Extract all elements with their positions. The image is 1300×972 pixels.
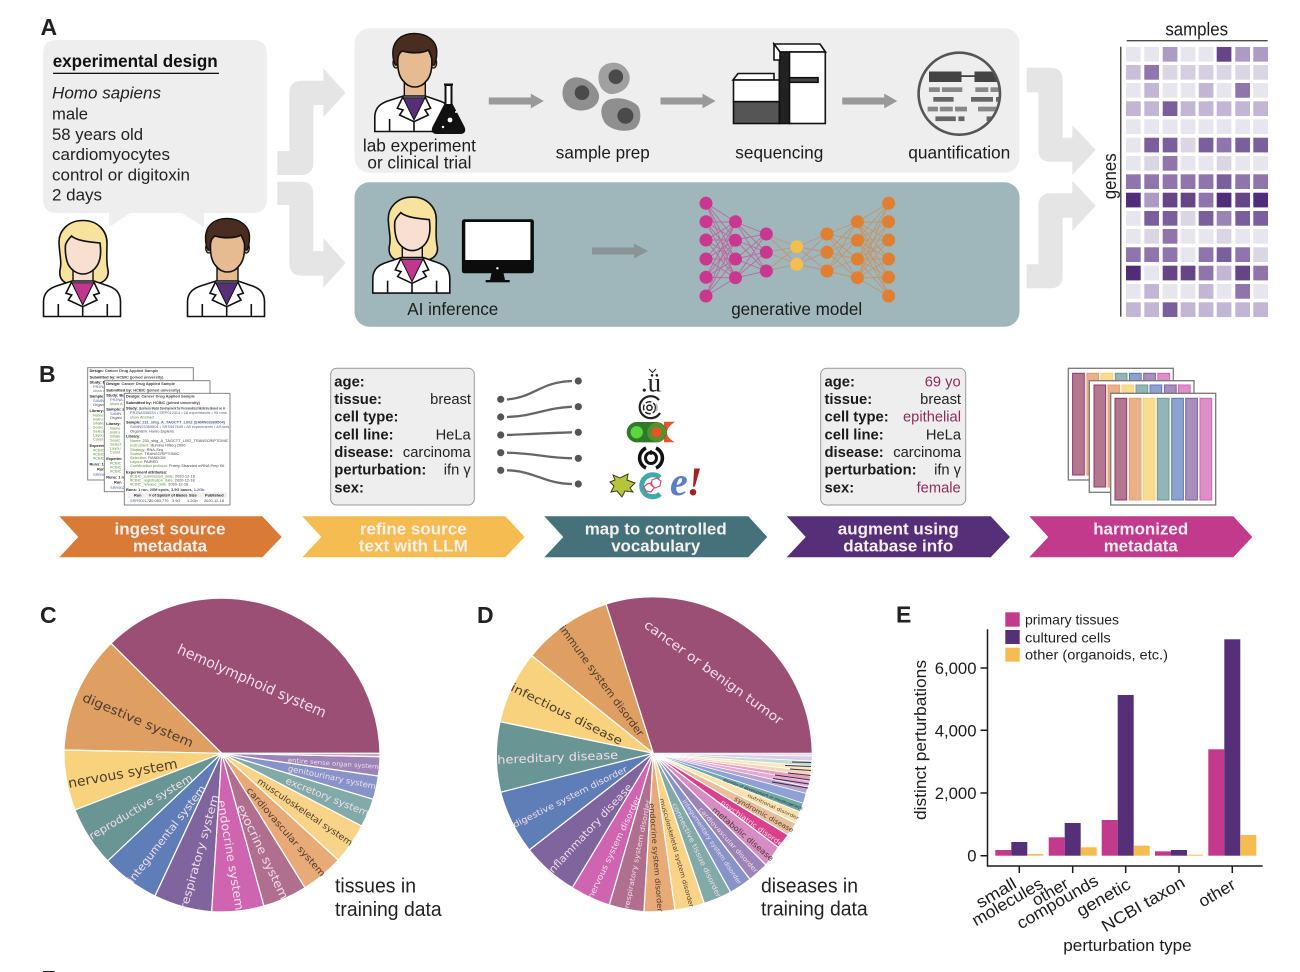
chart: diseases pie: inflammatory disease [544, 782, 635, 878]
panel letter C: C [40, 602, 57, 628]
panel: sparse metadata fields: cell type: [334, 410, 398, 426]
panel: source metadata documents: Runs: 1 run [106, 474, 128, 480]
panel: source metadata documents: #CBIC [93, 448, 105, 452]
chart: tissues pie: endocrine system [214, 799, 247, 911]
panel: source metadata documents: Submitted by: HCBIC (joined university) [106, 388, 181, 392]
panel: source metadata documents: Design: Cancer Drug Applied Sample [126, 394, 196, 398]
panel: source metadata documents: Layou [110, 446, 121, 450]
icon: quantification reads [919, 53, 1000, 135]
chart: diseases pie: immune system disorder [556, 623, 646, 739]
panel: augmented metadata fields: disease: [824, 445, 884, 461]
chart: diseases pie: hereditary disease [497, 748, 618, 767]
label: diseases in training data: training data [761, 899, 869, 921]
panel: source metadata documents: 3.9G [172, 498, 180, 503]
label: samples: samples [1165, 20, 1228, 40]
x axis title: perturbation type [1063, 936, 1192, 955]
panel: source metadata documents: #CBIC [110, 468, 122, 474]
step: augment using database info [787, 516, 1010, 557]
panel: source metadata documents: 20,083,770 [149, 498, 169, 503]
arrow: to sample prep [489, 94, 544, 108]
panel: source metadata documents: Study: Busi [106, 392, 128, 398]
panel: source metadata documents: SRR9021 [93, 472, 110, 477]
step: ingest source metadata: ingest source [114, 519, 226, 538]
panel: source metadata documents: Design: Cancer Drug Applied Sample [90, 368, 159, 373]
text block: design attributes: control or digitoxin [52, 166, 190, 185]
panel: augmented metadata fields: 69 yo [925, 375, 961, 391]
label: quantification: quantification [908, 142, 1010, 162]
chart: gene by sample heatmap [1100, 20, 1268, 317]
y tick labels: 2,000 [935, 784, 976, 803]
chart: tissues pie: entire sense organ system [288, 757, 379, 771]
panel: source metadata documents: Source: TRANSCRIPTOMIC [130, 451, 180, 456]
icon: vocabulary logo neuron [610, 474, 635, 497]
panel: sparse metadata fields: carcinoma [403, 445, 472, 461]
chart: diseases pie: psychiatric disorder [719, 799, 787, 850]
label: tissues in training data: training data [335, 899, 443, 921]
panel: source metadata documents: Sourc [93, 424, 103, 430]
panel: augmented metadata fields: female [917, 480, 961, 496]
chart: tissues pie: nervous system [67, 756, 179, 792]
chart: tissues pie: reproductive system [87, 772, 195, 842]
panel: source metadata documents: Library: [126, 434, 140, 439]
icon: vocabulary logo ring [640, 448, 662, 468]
panel letter D: D [477, 602, 494, 628]
panel: source metadata documents: Layout: PAIRED [130, 459, 158, 464]
panel: source metadata documents: Selection: RANDOM [130, 455, 165, 460]
panel: source metadata documents: show A [110, 401, 123, 406]
icon: man scientist [188, 218, 264, 316]
panel: augmented metadata fields: sex: [824, 480, 854, 496]
panel: source metadata documents: Select [110, 442, 122, 446]
panel: augmented metadata fields: epithelial [903, 410, 961, 426]
bars: other compounds [1049, 823, 1097, 856]
panel: source metadata documents: Experim [106, 456, 122, 461]
panel: source metadata documents: Instru [93, 416, 103, 422]
arrow: split up to lab path [277, 68, 346, 175]
panel: sparse metadata fields: cell line: [334, 427, 394, 443]
legend: other (organoids, etc.) [1025, 647, 1168, 663]
icon: vocabulary logo spiral [640, 396, 660, 418]
x tick labels: other [1195, 875, 1239, 911]
panel: source metadata documents: Run [114, 480, 122, 484]
chart: diseases pie: nervous system disorder [585, 794, 643, 900]
chart: perturbation bar chart [911, 612, 1263, 955]
chart: tissues pie: musculoskeletal system [255, 777, 354, 848]
chart: diseases pie: metabolic disease [710, 805, 776, 863]
panel: source metadata documents: show Abstract [130, 414, 155, 419]
bars: small molecules [995, 842, 1043, 856]
icon: vocabulary logo e!: e! [670, 459, 702, 504]
panel: augmented metadata fields: age: [824, 375, 855, 391]
panel: source metadata documents: #CBIC [93, 456, 105, 460]
arrow: to quantification [842, 94, 897, 108]
text block: design attributes [52, 83, 190, 205]
step: map to controlled vocabulary [544, 516, 767, 557]
panel: source metadata documents: Design: Cancer Drug Applied Sample [106, 381, 176, 386]
icon: vocabulary logo dot u: .ü [641, 368, 662, 398]
diagram: term mapping connectors [497, 377, 582, 488]
panel: source metadata documents: Submitted by: HCBIC (joined university) [90, 374, 164, 380]
icon: vocabulary logo green and red [627, 422, 675, 442]
icon: woman scientist [44, 220, 120, 316]
chart: tissues pie: cardiovascular system [244, 785, 327, 879]
panel: source metadata documents: 2020-12-18 [204, 498, 224, 503]
chart: diseases pie [496, 597, 812, 913]
panel: source metadata documents: Submitted by: HCBIC (joined university) [126, 400, 201, 405]
panel: augmented metadata fields [821, 368, 966, 505]
panel: source metadata documents: Run [97, 466, 105, 472]
step: ingest source metadata: metadata [133, 537, 208, 556]
chart: diseases pie: cancer or benign tumor [641, 618, 786, 729]
panel: sparse metadata fields: ifn γ [444, 462, 471, 478]
text block: design attributes: male [52, 104, 88, 123]
panel: source metadata documents: SAMN [93, 398, 104, 403]
panel: source metadata documents [88, 368, 230, 505]
label: lab experiment: or clinical trial [367, 152, 471, 172]
legend: primary tissues [1025, 612, 1119, 628]
x tick labels: small [973, 874, 1020, 912]
panel: source metadata documents: Layou [93, 432, 104, 438]
panel: source metadata documents: SRR902172 [130, 498, 151, 503]
panel: source metadata documents: Strategy: RNA-Seq [130, 447, 163, 452]
panel: source metadata documents: #CBIC [110, 464, 122, 470]
panel: sparse metadata fields [331, 368, 474, 505]
chart: diseases pie: integumentary system disorder [681, 798, 743, 886]
panel letter A: A [40, 14, 57, 40]
arrow: split down to AI path [277, 182, 346, 288]
label: sequencing: sequencing [735, 142, 823, 162]
step: refine source text with LLM: refine source [360, 519, 467, 538]
text block: design attributes: cardiomyocytes [52, 145, 170, 164]
panel: sparse metadata fields: breast [430, 392, 471, 408]
panel: source metadata documents: Runs: 1 run [90, 462, 112, 466]
panel: source metadata documents: Experim [90, 443, 105, 448]
bars: NCBI taxon [1155, 850, 1203, 856]
panel: source metadata documents: Size [189, 492, 198, 498]
panel: source metadata documents: Study: Bus [90, 380, 110, 384]
legend [1005, 612, 1168, 663]
icon: vocabulary logo teal ring [642, 475, 661, 497]
chart: tissues pie: integumental system [125, 783, 209, 886]
axes [980, 629, 1263, 873]
step: harmonized metadata [1029, 516, 1252, 557]
chart: diseases pie: cardiovascular disorder [697, 806, 759, 875]
panel: augmented metadata fields: ifn γ [934, 462, 962, 478]
label: generative model: generative model [731, 299, 862, 319]
label: lab experiment: lab experiment [363, 136, 476, 156]
panel: source metadata documents: Organism: Homo sapiens [130, 428, 174, 433]
panel: source metadata documents: #CBIC_release_date: 2020-12-18 [130, 482, 188, 486]
bars: genetic [1102, 695, 1150, 856]
panel: source metadata documents: Select [93, 428, 105, 434]
panel: source metadata documents: Name [93, 412, 103, 418]
y tick labels: 4,000 [935, 721, 976, 740]
label: tissues in training data: tissues in [335, 876, 416, 898]
panel: source metadata documents: show A [93, 388, 106, 393]
step: map to controlled vocabulary: vocabulary [611, 537, 701, 556]
chart: tissues pie [64, 598, 380, 912]
step: augment using database info: augment using [838, 519, 959, 538]
panel: source metadata documents: Organi [93, 402, 105, 407]
chart: tissues pie: digestive system [80, 690, 196, 750]
icon: scientist [373, 197, 450, 293]
chart: tissues pie: hemolymphoid system [175, 642, 328, 721]
panel: sparse metadata fields: disease: [334, 445, 394, 461]
label: diseases in training data: diseases in [761, 875, 858, 897]
label: AI inference: AI inference [407, 299, 498, 319]
chart: diseases pie: respiratory system disorder [623, 799, 653, 909]
chart: diseases pie: musculoskeletal system disorder [658, 798, 695, 908]
panel: experimental design speech bubble [43, 40, 267, 227]
panel: source metadata documents: Run [134, 492, 142, 498]
y tick labels: 0 [967, 847, 976, 866]
panel: sparse metadata fields: age: [334, 375, 365, 391]
chart: generative neural network [700, 197, 895, 302]
step: refine source text with LLM [302, 516, 525, 557]
panel: source metadata documents: Sample: 23 [106, 406, 128, 412]
chart: diseases pie: disorder of development or morphogenesis [723, 778, 803, 811]
panel: sparse metadata fields: sex: [334, 480, 364, 496]
panel: sparse metadata fields: HeLa [436, 427, 472, 443]
x tick labels: compounds [1013, 871, 1102, 933]
chart: tissues pie: respiratory system [178, 793, 222, 910]
y tick labels: 6,000 [935, 659, 976, 678]
y axis title: distinct perturbations [911, 660, 930, 820]
panel: augmented metadata fields: cell line: [824, 427, 884, 443]
panel: source metadata documents: #CBIC_submission_date: 2020-12-18 [130, 473, 195, 478]
arrow: to generative model [592, 244, 648, 258]
panel: source metadata documents: Strate [93, 420, 103, 426]
bars: other [1208, 639, 1256, 856]
panel: augmented metadata fields: cell type: [824, 410, 889, 426]
step: augment using database info: database info [843, 537, 953, 556]
chart: diseases pie: syndromic disease [733, 795, 795, 834]
panel: source metadata documents: Sample: 23 [90, 394, 111, 398]
x tick labels: NCBI taxon [1098, 873, 1188, 936]
panel: source metadata documents: Published [205, 492, 224, 498]
panel: source metadata documents: Sample: 231_shig_A_TAGCTT_L002 (SAMN03369504) [126, 419, 226, 424]
x tick labels: molecules [969, 874, 1046, 930]
panel: source metadata documents: Construction protocol: Purely-Stranded mRNA Prep Kit [130, 463, 225, 468]
chart: diseases pie: infectious disease [509, 680, 625, 748]
arrow: lab path to matrix [1027, 68, 1096, 175]
x tick labels: other [1029, 874, 1072, 910]
icon: cells [562, 63, 640, 131]
panel: harmonized metadata tables [1068, 368, 1216, 505]
text block: design attributes: 2 days [52, 186, 102, 205]
panel: source metadata documents: Sourc [110, 438, 120, 442]
panel: source metadata documents: Library: [106, 421, 121, 426]
panel: source metadata documents: #CBIC [110, 460, 122, 466]
panel: source metadata documents: PRJNA [93, 384, 106, 389]
panel: source metadata documents: Const [93, 436, 104, 442]
panel: source metadata documents: SAMN03369504 • SRS947649 • All experiments • All runs [130, 424, 229, 429]
panel: source metadata documents: Instrument: Illumina HiSeq 2000 [130, 442, 186, 448]
panel: AI workflow [354, 182, 1020, 327]
chart: tissues pie: excretory system [284, 776, 370, 819]
panel: source metadata documents: Const [110, 450, 121, 454]
panel: source metadata documents: #CBIC_registration_date: 2020-12-18 [130, 478, 195, 482]
step: harmonized metadata: metadata [1104, 537, 1178, 556]
step: map to controlled vocabulary: map to controlled [585, 519, 727, 538]
panel: source metadata documents: Experiment attributes: [126, 469, 167, 474]
panel: source metadata documents: Strate [110, 434, 120, 438]
panel: lab workflow [354, 28, 1020, 173]
panel: source metadata documents: PRJNA536534 • SRP012314 • 16 experiments • 95 runs [130, 410, 227, 415]
chart: diseases pie: endocrine system disorder [647, 803, 665, 913]
panel: source metadata documents: # of Spots [149, 492, 168, 498]
chart: tissues pie: exocrine system [234, 802, 291, 901]
panel: augmented metadata fields: perturbation: [824, 462, 917, 478]
legend: cultured cells [1025, 629, 1111, 645]
x tick labels: genetic [1073, 875, 1134, 921]
panel: source metadata documents: 1.2Gb [187, 498, 198, 503]
panel letter B: B [39, 361, 56, 387]
y tick labels [935, 659, 976, 866]
icon: scientist with flask [375, 34, 464, 133]
chart: diseases pie: connective tissue disorder [670, 802, 722, 899]
step: ingest source metadata [59, 516, 282, 557]
step: harmonized metadata: harmonized [1093, 519, 1188, 538]
panel: source metadata documents: SAMN [110, 411, 121, 416]
panel: augmented metadata fields: tissue: [824, 392, 872, 408]
text block: design attributes: 58 years old [52, 125, 143, 144]
panel letter E: E [896, 602, 911, 628]
arrow: to sequencing [660, 94, 716, 108]
chart: diseases pie: digestive system disorder [512, 765, 630, 830]
panel: sparse metadata fields: perturbation: [334, 462, 426, 478]
icon: computer monitor [462, 219, 534, 282]
chart: tissues pie: genitourinary system [287, 764, 377, 791]
text block: design attributes: Homo sapiens [52, 83, 161, 102]
heading: experimental design: experimental design [53, 51, 218, 71]
label: sample prep: sample prep [556, 142, 650, 162]
x tick labels [969, 871, 1239, 936]
label: genes: genes [1100, 153, 1120, 199]
panel: source metadata documents: PRJNA [110, 397, 123, 402]
step: refine source text with LLM: text with LLM [359, 537, 468, 556]
panel: augmented metadata fields: breast [920, 392, 961, 408]
panel: source metadata documents: SRR9021 [110, 485, 127, 490]
panel: source metadata documents: Name [110, 426, 120, 430]
panel: source metadata documents: #CBIC [93, 452, 105, 456]
arrow: AI path to matrix [1027, 181, 1096, 288]
panel: source metadata documents: # of Bases [168, 492, 187, 498]
panel: source metadata documents: Name: 231_shig_A_TAGCTT_L002_TRANSCRIPTOMIC [130, 438, 229, 443]
panel: source metadata documents: Instru [110, 430, 120, 434]
panel: augmented metadata fields: HeLa [926, 427, 962, 443]
icon: sequencer [733, 44, 826, 124]
panel: source metadata documents: Study: Business Model Development for Personalized Medicine Based on in [126, 405, 226, 410]
chart: diseases pie: nutritional disorder [746, 793, 800, 822]
panel: sparse metadata fields: tissue: [334, 392, 382, 408]
panel: augmented metadata fields: carcinoma [893, 445, 962, 461]
panel: source metadata documents: Runs: 1 run, 20M spots, 3.9G bases, 1.2Gb [126, 487, 205, 492]
panel: source metadata documents: Library: [90, 408, 104, 413]
panel: source metadata documents: Organi [110, 415, 122, 420]
